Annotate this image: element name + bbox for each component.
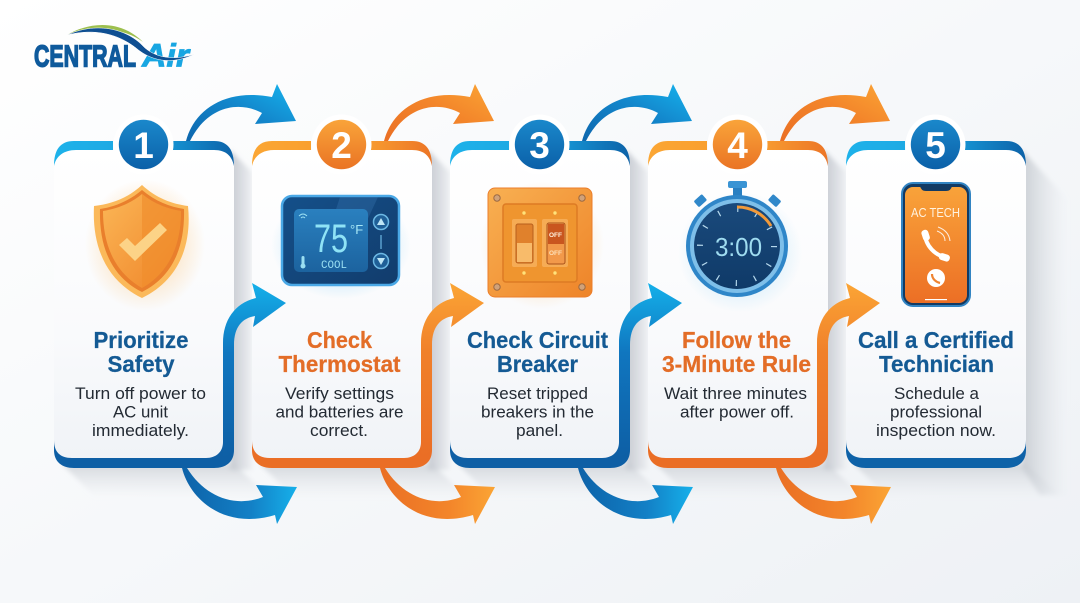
heading: step 2: Thermostat <box>278 351 401 377</box>
panel: step 4 card <box>648 141 828 468</box>
logo: Central Air: CENTRAL <box>34 38 136 74</box>
icon: circuit breaker <box>480 181 604 309</box>
icon: smartphone <box>902 183 970 306</box>
panel: step 3 card <box>450 141 630 468</box>
text: step 3: panel. <box>516 422 563 440</box>
heading: step 3: Check Circuit <box>467 327 608 353</box>
step number 1 <box>114 114 174 174</box>
text: step 4: after power off. <box>680 404 794 422</box>
arrow: step 1 bottom <box>182 468 297 524</box>
heading: step 4: Follow the <box>682 327 791 353</box>
step number 3 <box>510 114 570 174</box>
step number 3: 3 <box>529 125 550 166</box>
text: step 4: Wait three minutes <box>664 385 807 403</box>
arrow: step 4 top <box>780 84 890 141</box>
icon: thermostat: °F <box>350 222 363 237</box>
arrow: step 1 side <box>223 283 286 458</box>
text: step 2: Verify settings <box>285 385 394 403</box>
text: step 1: AC unit <box>113 404 168 422</box>
icon: circuit breaker: OFF <box>549 250 562 257</box>
arrow: step 2 side <box>421 283 484 458</box>
text: step 5: inspection now. <box>876 422 996 440</box>
text: step 3: Reset tripped <box>487 385 588 403</box>
step number 2 <box>312 114 372 174</box>
heading: step 4: 3-Minute Rule <box>662 351 811 377</box>
text: step 5: professional <box>890 404 982 422</box>
icon: thermostat: 75 <box>314 217 348 261</box>
arrow: step 2 bottom <box>380 468 495 524</box>
icon: thermostat <box>271 191 411 299</box>
text: step 2: correct. <box>310 422 368 440</box>
card shadows <box>62 150 1068 498</box>
text: step 3: breakers in the <box>481 404 594 422</box>
heading: step 1 <box>94 327 188 377</box>
text: step 1: immediately. <box>92 422 189 440</box>
arrow: step 3 top <box>582 84 692 141</box>
heading: step 4 <box>662 327 811 377</box>
icon: smartphone: AC TECH <box>911 206 960 220</box>
arrow: step 4 bottom <box>776 468 891 524</box>
heading: step 3: Breaker <box>497 351 578 377</box>
panel: step 2 card <box>252 141 432 468</box>
logo: Central Air: Air <box>141 38 191 74</box>
panel: step 1 card <box>54 141 234 468</box>
heading: step 1: Safety <box>108 351 175 377</box>
icon: circuit breaker: OFF <box>549 232 562 239</box>
arrow: step 1 top <box>186 84 296 141</box>
heading: step 2 <box>278 327 401 377</box>
text: step 5: Schedule a <box>894 385 980 403</box>
icon: safety shield <box>85 179 205 311</box>
text: step 2 <box>276 385 404 440</box>
step number 5: 5 <box>925 125 946 166</box>
text: step 4 <box>664 385 807 422</box>
heading: step 3 <box>467 327 608 377</box>
arrow: step 2 top <box>384 84 494 141</box>
text: step 2: and batteries are <box>276 404 404 422</box>
icon: stopwatch <box>678 181 802 312</box>
step number 1: 1 <box>133 125 154 166</box>
text: step 5 <box>876 385 996 440</box>
logo: Central Air <box>34 25 195 74</box>
step number 5 <box>906 114 966 174</box>
step number 2: 2 <box>331 125 352 166</box>
step number 4 <box>708 114 768 174</box>
text: step 1 <box>75 385 206 440</box>
panel: step 5 card <box>846 141 1026 468</box>
arrow: step 4 side <box>817 283 880 458</box>
arrow: step 3 bottom <box>578 468 693 524</box>
step number 4: 4 <box>727 125 748 166</box>
icon: stopwatch: 3:00 <box>715 232 762 262</box>
heading: step 2: Check <box>307 327 372 353</box>
arrow: step 3 side <box>619 283 682 458</box>
heading: step 5: Call a Certified <box>858 327 1014 353</box>
icon: thermostat: COOL <box>321 260 347 272</box>
heading: step 5 <box>858 327 1014 377</box>
heading: step 1: Prioritize <box>94 327 188 353</box>
heading: step 5: Technician <box>879 351 994 377</box>
text: step 1: Turn off power to <box>75 385 206 403</box>
text: step 3 <box>481 385 594 440</box>
